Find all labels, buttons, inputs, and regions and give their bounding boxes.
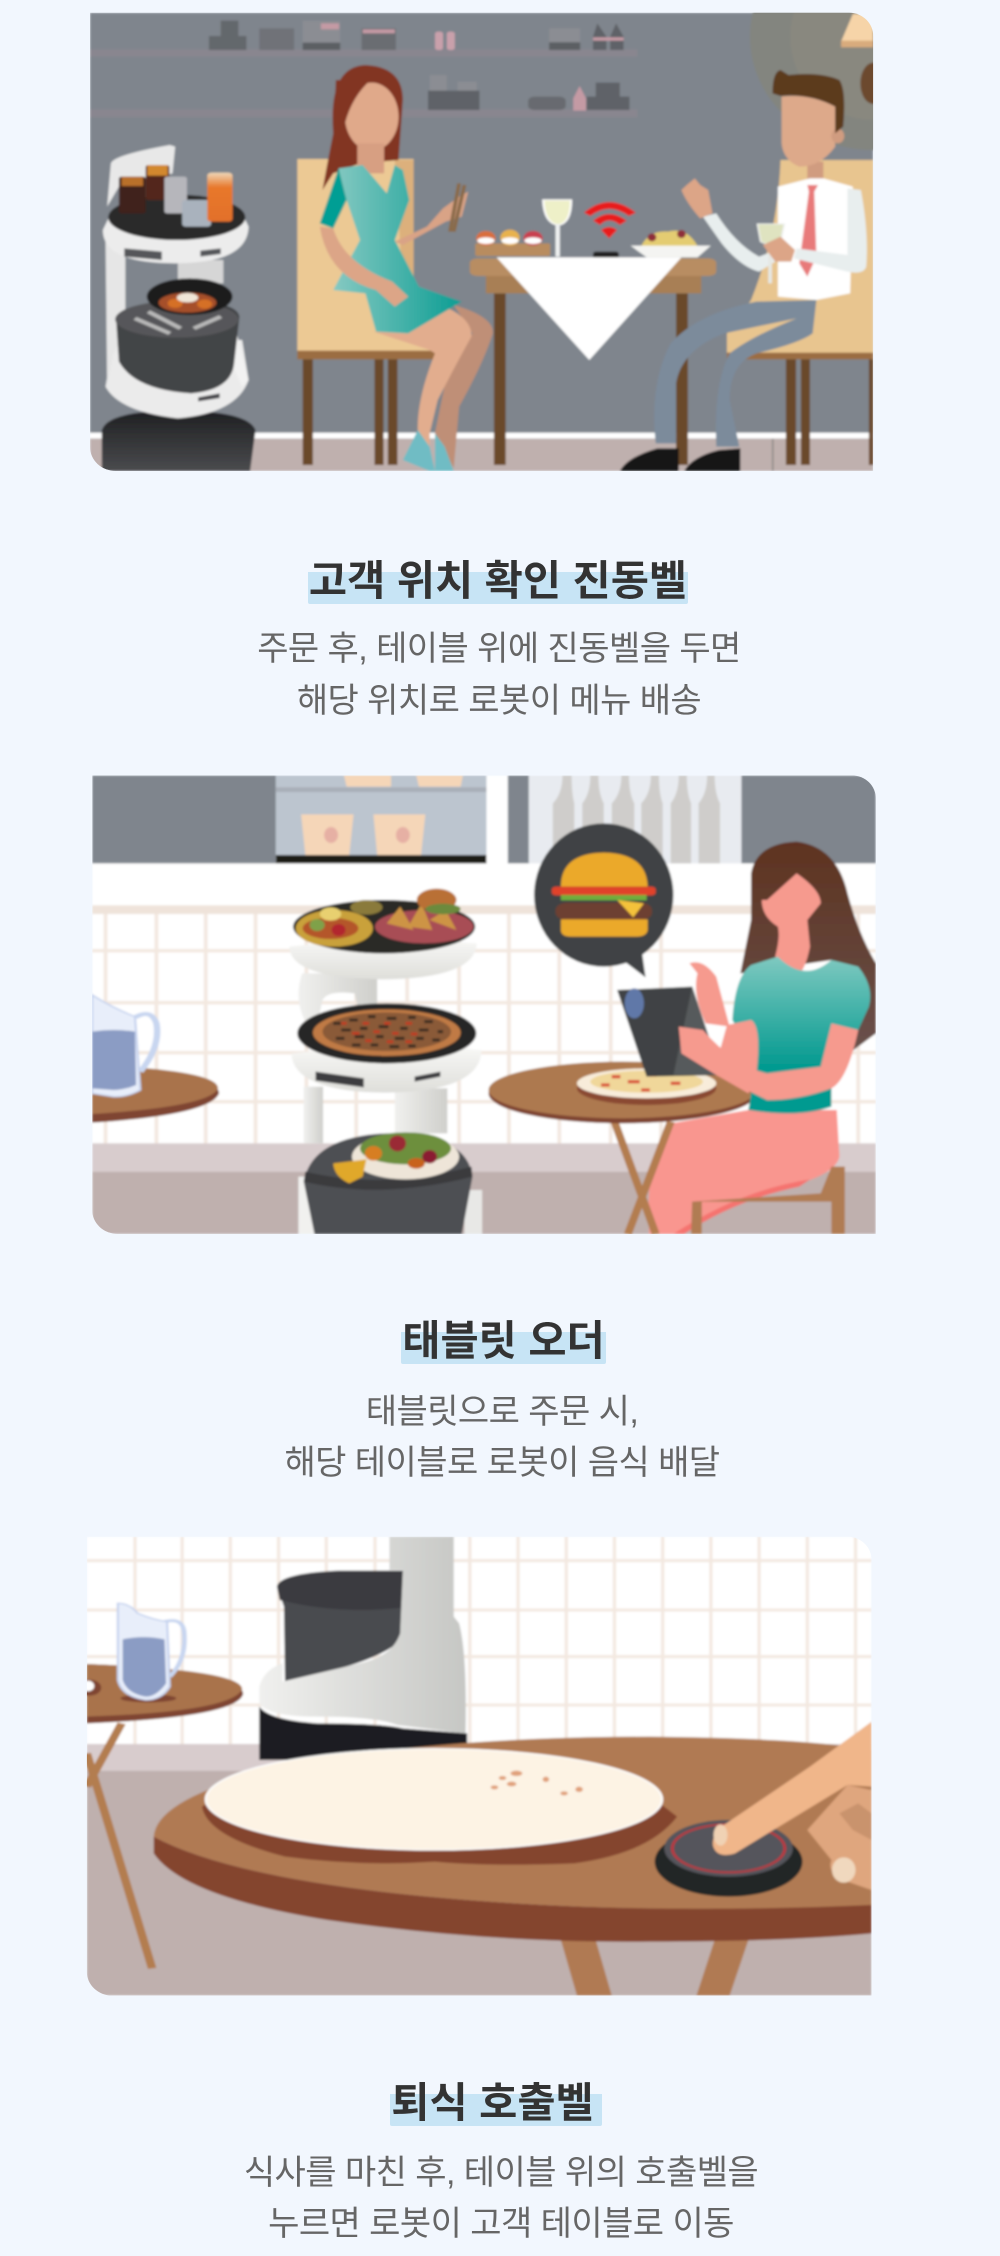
right table with pizza <box>489 1062 756 1234</box>
description: 태블릿으로 주문 시, <box>366 1393 638 1431</box>
table with cloth, food and wifi bell <box>470 200 716 465</box>
heading: customer location vibration bell: 고객 위치 확인 진동벨 <box>309 557 687 604</box>
description: 누르면 로봇이 고객 테이블로 이동 <box>268 2204 734 2242</box>
shelves with bottles <box>90 21 638 117</box>
tiled wall and floor <box>92 775 876 1234</box>
back kitchen shelves <box>92 775 876 863</box>
illustration: finger pressing call bell on table <box>86 1536 872 1996</box>
serving robot with drinks <box>102 145 256 471</box>
heading: exit call bell: 퇴식 호출벨 <box>391 2079 594 2126</box>
man diner <box>620 70 867 471</box>
panel: tablet order <box>92 776 876 1482</box>
woman's chair <box>297 159 446 465</box>
illustration: robot serving woman with tablet <box>92 776 876 1234</box>
speech bubble with burger <box>534 823 673 977</box>
skirt and stool of seated woman <box>648 1110 845 1234</box>
description <box>244 2154 758 2242</box>
description <box>284 1393 720 1482</box>
description: 주문 후, 테이블 위에 진동벨을 두면 <box>257 630 741 668</box>
wall and floor <box>90 12 874 471</box>
call bell button <box>655 1820 802 1897</box>
serving robot with three trays <box>289 889 482 1234</box>
man's chair <box>727 160 873 465</box>
tiled wall and floor <box>87 1537 872 1996</box>
serving robot <box>259 1537 467 1760</box>
plate <box>202 1749 677 1865</box>
small table with pitcher <box>78 1603 243 1968</box>
left table with water pitcher <box>92 995 219 1123</box>
woman using tablet <box>617 842 876 1113</box>
pointing hand <box>713 1722 872 1890</box>
description: 식사를 마친 후, 테이블 위의 호출벨을 <box>244 2154 758 2192</box>
heading: tablet order: 태블릿 오더 <box>402 1317 605 1364</box>
panel: exit call bell <box>86 1536 872 2242</box>
description: 해당 테이블로 로봇이 음식 배달 <box>284 1444 720 1482</box>
woman diner <box>320 65 493 471</box>
illustration: robot delivering to couple at table <box>90 12 874 471</box>
main table top <box>154 1737 872 1996</box>
description <box>257 630 741 720</box>
wall lamp <box>840 13 874 105</box>
description: 해당 위치로 로봇이 메뉴 배송 <box>297 682 701 720</box>
panel: customer location vibration bell <box>90 12 874 720</box>
